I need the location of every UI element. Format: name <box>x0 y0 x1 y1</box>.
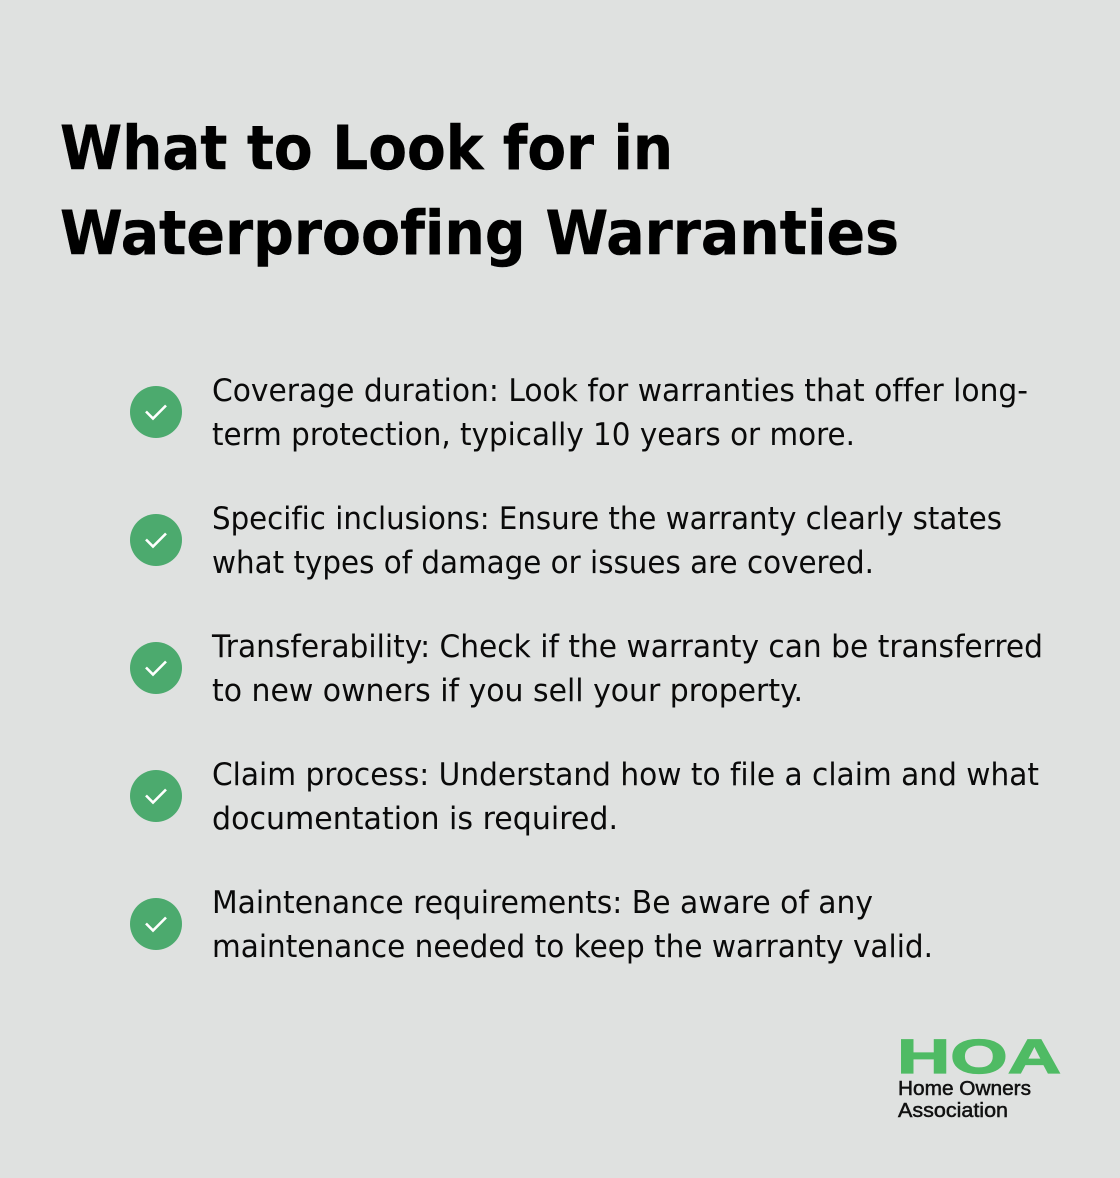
text: claim process <box>212 757 1039 837</box>
item: maintenance requirements <box>130 885 933 965</box>
text: coverage duration: Coverage duration: Look for warranties that offer long- <box>212 373 1028 409</box>
icon: check circle <box>130 514 182 566</box>
text: specific inclusions: Specific inclusions: Ensure the warranty clearly states <box>212 501 1002 537</box>
logo tagline: Home Owners <box>898 1078 1031 1100</box>
item: specific inclusions <box>130 501 1002 581</box>
title: What to Look for in <box>60 113 673 184</box>
text: maintenance requirements: Maintenance requirements: Be aware of any <box>212 885 873 921</box>
logo wordmark: HOA <box>897 1031 1061 1084</box>
logo tagline: Association <box>898 1100 1008 1122</box>
text: maintenance requirements <box>212 885 933 965</box>
icon: check circle <box>130 386 182 438</box>
text: coverage duration <box>212 373 1028 453</box>
text: transferability: to new owners if you sell your property. <box>212 673 803 709</box>
text: transferability: Transferability: Check if the warranty can be transferred <box>211 629 1043 665</box>
item: transferability <box>130 629 1043 709</box>
text: maintenance requirements: maintenance needed to keep the warranty valid. <box>212 929 933 965</box>
text: specific inclusions: what types of damage or issues are covered. <box>212 545 874 581</box>
title <box>60 113 899 269</box>
icon: check circle <box>130 898 182 950</box>
icon: check circle <box>130 770 182 822</box>
logo tagline <box>898 1078 1031 1122</box>
text: transferability <box>211 629 1043 709</box>
checklist <box>130 373 1043 965</box>
text: claim process: Claim process: Understand how to file a claim and what <box>212 757 1039 793</box>
text: specific inclusions <box>212 501 1002 581</box>
logo: HOA <box>897 1031 1061 1122</box>
title: Waterproofing Warranties <box>60 198 899 269</box>
item: claim process <box>130 757 1039 837</box>
item: coverage duration <box>130 373 1028 453</box>
text: coverage duration: term protection, typically 10 years or more. <box>212 417 855 453</box>
icon: check circle <box>130 642 182 694</box>
text: claim process: documentation is required. <box>212 801 618 837</box>
